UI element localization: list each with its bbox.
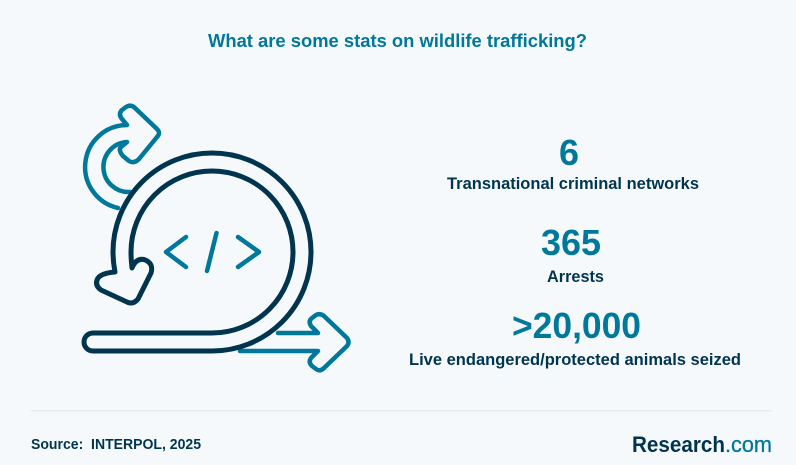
logo: Research.com: Research bbox=[632, 432, 725, 457]
stat label: networks: Transnational criminal networks bbox=[447, 174, 699, 193]
stat: arrests bbox=[541, 222, 604, 286]
title: What are some stats on wildlife trafficking? bbox=[208, 31, 587, 51]
stat number: 365: 365 bbox=[541, 222, 601, 263]
stat number: 6: 6 bbox=[559, 132, 579, 173]
icon: teal straight arrow bbox=[240, 314, 348, 370]
stat: animals seized bbox=[409, 305, 741, 369]
stat label: arrests: Arrests bbox=[547, 267, 604, 286]
source note: Source: INTERPOL, 2025 bbox=[31, 437, 201, 453]
stat label: animals: Live endangered/protected animals seized bbox=[409, 350, 741, 369]
icon: code brackets bbox=[166, 233, 259, 271]
stat number: over 20,000: >20,000 bbox=[512, 305, 641, 346]
logo: Research.com: .com bbox=[725, 432, 772, 457]
icon: agile loop with code symbol bbox=[84, 106, 348, 370]
stat: transnational criminal networks bbox=[447, 132, 699, 193]
icon: dark spiral arrow bbox=[84, 153, 311, 351]
icon: teal curved arrow bbox=[85, 106, 159, 208]
